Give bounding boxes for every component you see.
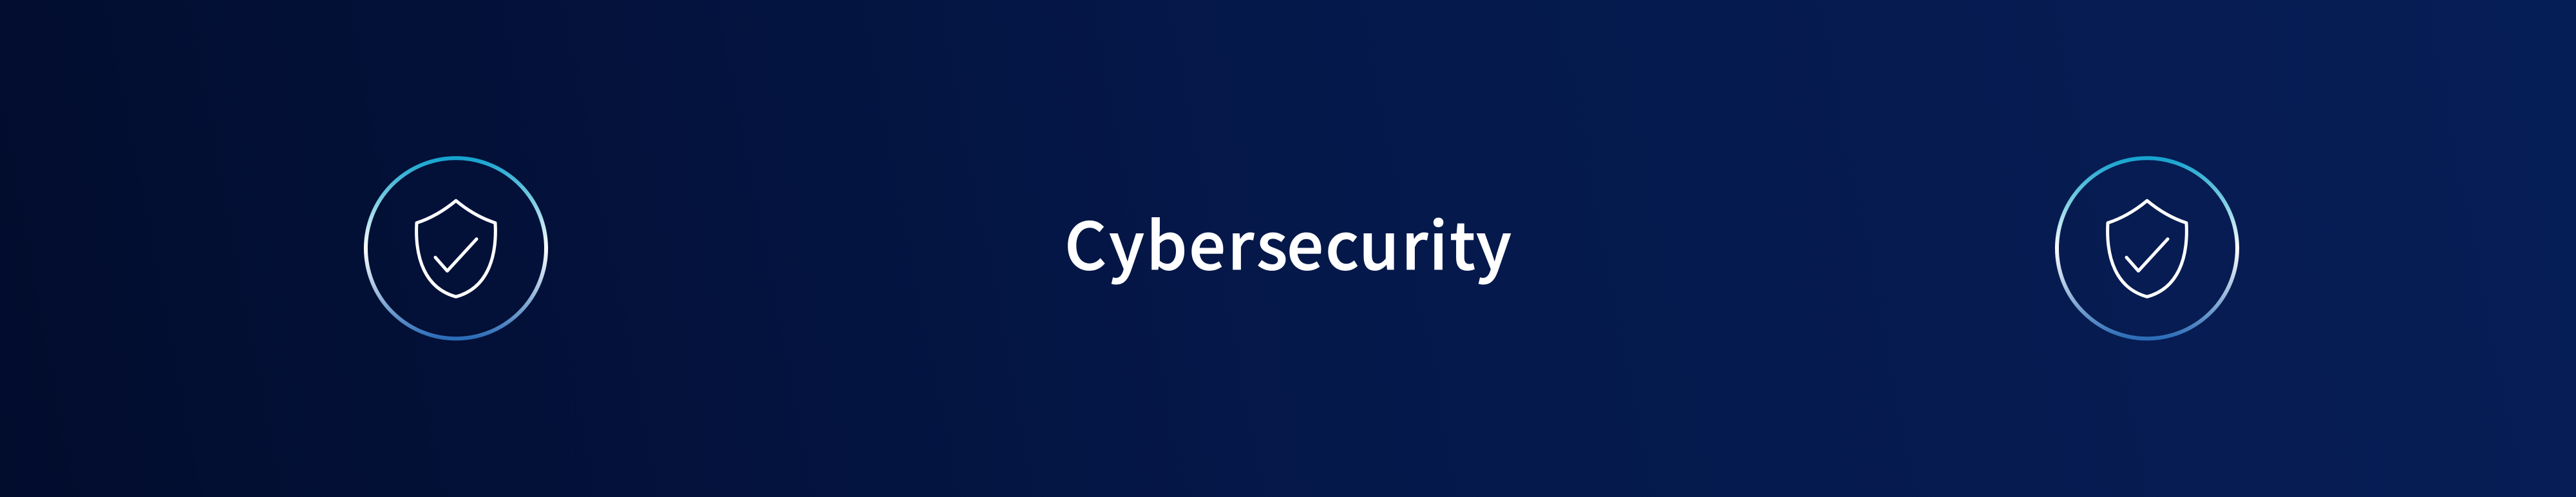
- title: Cybersecurity: [1065, 195, 1511, 289]
- right shield with check: [2108, 200, 2186, 297]
- icon: right shield badge: [2057, 158, 2237, 338]
- icon: left shield badge: [366, 158, 546, 338]
- right badge ring: [2057, 158, 2237, 338]
- left shield with check: [417, 200, 495, 297]
- left badge ring: [366, 158, 546, 338]
